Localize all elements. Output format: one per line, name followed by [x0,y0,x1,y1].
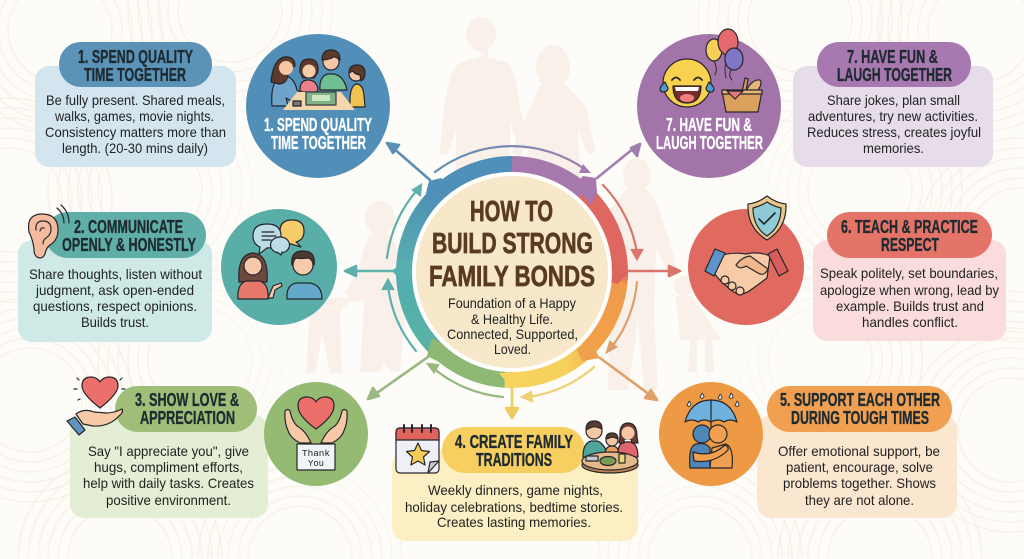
body text 1: walks, games, movie nights. [54,108,214,124]
ring nodes [392,176,629,389]
arrow to 4 [506,388,518,418]
body text 6: example. Builds trust and [836,298,984,314]
panel 6: teach respect [813,212,1006,341]
body text 3: hugs, compliment efforts, [94,459,243,475]
yellow arc [522,367,594,401]
body text 3: help with daily tasks. Creates [83,475,254,491]
pill heading 5: 5. SUPPORT EACH OTHER [780,390,940,410]
body text 7: Reduces stress, creates joyful [807,124,981,140]
card 4 [392,450,638,541]
icon: shield [748,196,786,240]
card 5 [757,415,957,518]
body text 4: Creates lasting memories. [437,514,591,530]
body text 5: problems together. Shows [783,475,936,491]
pill heading 4 [442,427,585,473]
teal upper arc [387,185,421,258]
panel 1: spend quality time [35,42,236,167]
blue to purple arc [435,146,591,173]
icon: heart in hand [67,377,125,435]
body text 5: patient, encourage, solve [786,459,933,475]
pill heading 3: 3. SHOW LOVE & [135,390,239,410]
thank you note text: Thank [302,449,330,459]
body text 2: Share thoughts, listen without [29,266,202,282]
card 3 [70,415,268,518]
circle 6 [688,196,804,325]
hub title [429,196,595,293]
hub subtitle [447,295,578,357]
pill heading 6 [827,212,992,258]
body text 6 [820,265,999,330]
icon: handshake [705,249,788,295]
body text 2: questions, respect opinions. [33,298,197,314]
hub title: HOW TO [470,196,553,228]
panel 4: create traditions [392,421,638,541]
card 7 [793,66,993,167]
card 2 [18,240,212,342]
pill heading 6: RESPECT [881,235,939,255]
icon: umbrella over hugging people [685,393,739,468]
body text 6: Speak politely, set boundaries, [820,265,998,281]
icon: family at dinner table [582,421,638,473]
pill heading 1 [59,42,212,87]
circle 3 [264,382,368,486]
circle 7 label [656,115,763,153]
body text 5: Offer emotional support, be [778,443,940,459]
icon: hands with heart and thank-you card [285,397,347,470]
body text 7: Share jokes, plan small [827,92,960,108]
body text 4: holiday celebrations, bedtime stories. [405,499,623,515]
arrow to 1 [387,143,430,180]
body text 5: they are not alone. [805,492,914,508]
circle 7 label: LAUGH TOGETHER [656,133,763,153]
body text 3: positive environment. [106,492,231,508]
green arc [428,364,503,397]
icon: balloons [706,29,743,80]
body text 1 [45,92,226,156]
pill heading 5 [767,386,952,432]
body text 6: handles conflict. [862,314,958,330]
hub subtitle: Foundation of a Happy [448,295,576,311]
pill heading 2: OPENLY & HONESTLY [62,235,196,255]
body text 2: judgment, ask open-ended [35,282,194,298]
arrow to 6 [627,266,680,276]
pill heading 3 [115,386,257,432]
circle 1 [246,34,390,178]
circle 7 label: 7. HAVE FUN & [666,115,752,135]
body text 7 [807,92,981,156]
body text 1: length. (20-30 mins daily) [62,140,208,156]
body text 4 [405,482,623,530]
circular arrows [383,146,642,401]
icon: family at table [271,50,365,110]
card 6 [813,240,1006,341]
pill heading 3: APPRECIATION [140,408,235,428]
hub: center circle [392,164,629,389]
icon: laughing face [660,59,714,107]
circle 5 [659,382,763,486]
arrow to 3 [368,357,428,399]
arrow to 2 [345,266,393,276]
pill heading 5: DURING TOUGH TIMES [791,408,929,428]
body text 7: adventures, try new activities. [808,108,978,124]
body text 3: Say "I appreciate you", give [88,443,249,459]
hub title: BUILD STRONG [432,228,593,260]
body text 2: Builds trust. [81,314,149,330]
body text 1: Be fully present. Shared meals, [46,92,225,108]
arrow to 7 [597,144,640,178]
hub ring segments [404,164,620,380]
body text 5 [778,443,940,508]
pill heading 7: LAUGH TOGETHER [837,65,952,85]
icon: ear [29,205,69,258]
arrow to 5 [600,358,657,400]
family silhouettes [306,17,722,390]
orange arc [607,282,637,352]
thank you note text: You [308,459,324,469]
hub subtitle: Connected, Supported, [447,326,578,342]
circle 1 label: 1. SPEND QUALITY [264,115,372,135]
icon: calendar with star [396,425,439,473]
teal lower arc [383,280,416,351]
panel 7: have fun [793,42,993,167]
body text 6: apologize when wrong, lead by [820,282,999,298]
pill heading 4: TRADITIONS [476,450,552,470]
body text 2 [29,266,202,330]
body text 1: Consistency matters more than [45,124,226,140]
hub subtitle: & Healthy Life. [471,311,553,327]
icon: picnic basket [722,78,762,112]
panel 5: support each other [757,386,957,518]
thank you note text [302,449,330,469]
hub title: FAMILY BONDS [429,261,595,293]
hub subtitle: Loved. [494,341,531,357]
pill heading 7: 7. HAVE FUN & [847,47,938,67]
circle 1 label: TIME TOGETHER [271,133,366,153]
body text 3 [83,443,254,508]
card 1 [35,66,236,167]
pill heading 1: TIME TOGETHER [84,65,186,85]
circle 2 [221,209,337,325]
body text 7: memories. [863,140,924,156]
pill heading 2: 2. COMMUNICATE [74,217,183,237]
radial arrows [345,143,680,418]
icon: speech bubbles and two people [238,220,322,299]
body text 4: Weekly dinners, game nights, [428,482,603,498]
pill heading 4: 4. CREATE FAMILY [455,432,573,452]
circle 7 [637,29,781,178]
red arc [603,185,642,259]
panel 3: show love [67,377,268,518]
circle 1 label [264,115,372,153]
pill heading 2 [45,212,206,258]
pill heading 7 [817,42,971,87]
pill heading 1: 1. SPEND QUALITY [78,47,193,67]
panel 2: communicate [18,205,212,342]
